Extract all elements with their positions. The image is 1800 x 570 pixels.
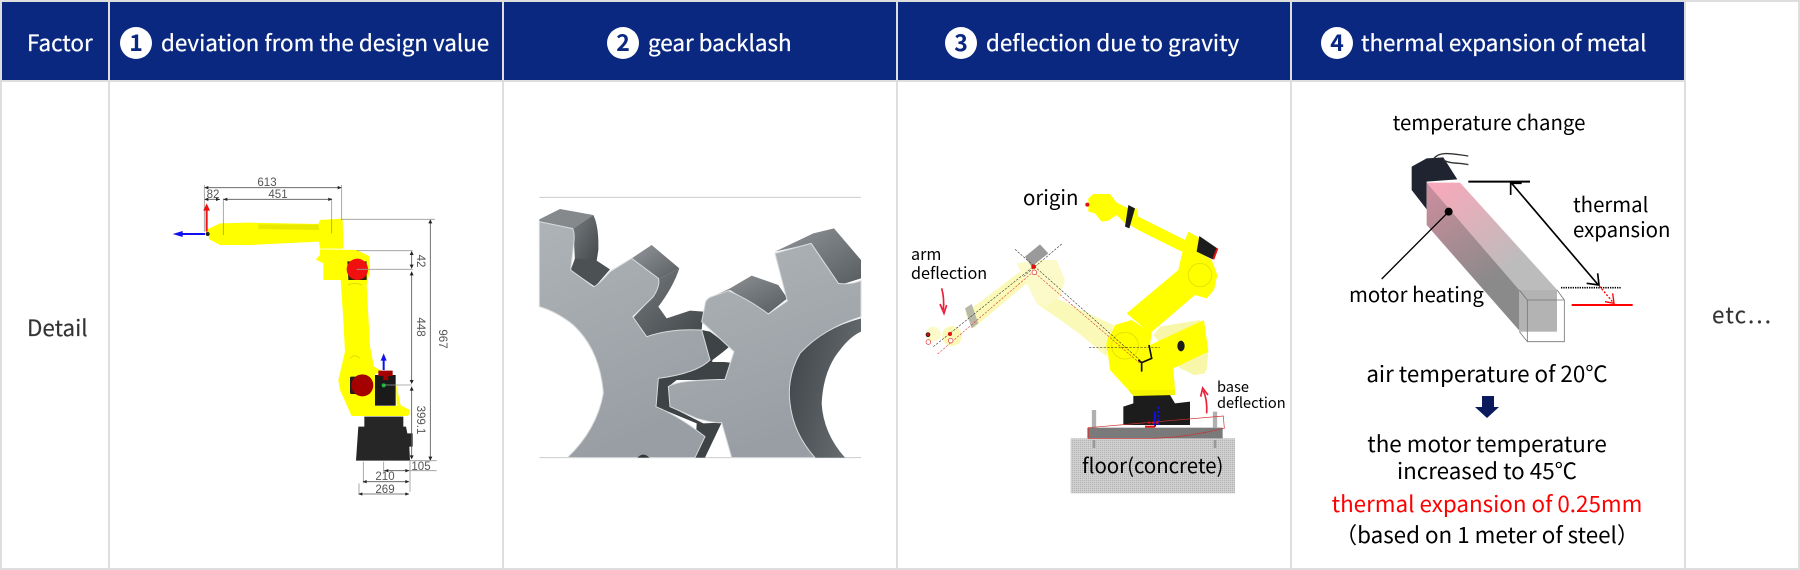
arm deflection arrow: [940, 288, 947, 313]
dimension labels: 210: [375, 471, 395, 483]
motor heating leader: [1382, 208, 1453, 279]
heading 2: 2: [616, 24, 630, 58]
robot deflection illustration: [911, 181, 1286, 493]
heading 3: 3: [954, 24, 968, 58]
text: motor temperature: increased to 45℃: [1397, 454, 1577, 486]
dimension labels: 613: [257, 177, 277, 189]
label: arm deflection: [911, 241, 987, 284]
steel bar: [1427, 183, 1564, 342]
thermal expansion diagram: [1382, 154, 1633, 342]
dimension labels: 399.1: [414, 406, 426, 434]
gears illustration: [539, 197, 861, 458]
motor: [1412, 154, 1468, 209]
label: floor: floor(concrete): [1082, 449, 1223, 479]
column 2: gear backlash: [504, 2, 896, 568]
dimension labels: 105: [411, 461, 431, 473]
heading: Factor: Factor: [27, 26, 93, 58]
left gear: [539, 209, 734, 458]
dimension labels: 42: [414, 255, 426, 267]
label: thermal expansion: thermal: [1573, 188, 1648, 218]
heading 3: deflection due to gravity: [986, 26, 1240, 58]
robot dimension drawing: [173, 177, 448, 496]
label: base deflection: [1217, 376, 1286, 413]
text: etc: etc…: [1712, 298, 1772, 330]
deflection guide lines: [926, 244, 1224, 438]
label: arm deflection: deflection: [911, 260, 987, 284]
ghost robot arm: [926, 244, 1207, 375]
robot arm body: [207, 219, 413, 461]
heading 1: deviation from the design value: [161, 26, 489, 58]
text: motor temperature: the motor temperature: [1367, 427, 1607, 459]
robot base: [1123, 395, 1190, 425]
base coordinate arrows: [1145, 407, 1158, 427]
base deflection arrow: [1201, 388, 1208, 413]
label: motor heating: motor heating: [1349, 278, 1484, 308]
heading 4: 4: [1330, 24, 1344, 58]
dimension labels: 967: [436, 329, 448, 349]
heading 2: gear backlash: [648, 26, 792, 58]
text: thermal expansion value: thermal expansion of 0.25mm: [1332, 487, 1642, 519]
label: base deflection: deflection: [1217, 392, 1286, 413]
dimension labels: 269: [375, 484, 395, 496]
icon: down arrow: [1475, 396, 1499, 418]
label: temperature change: temperature change: [1393, 106, 1585, 136]
dimension labels: 82: [207, 189, 219, 201]
label: arm deflection: arm: [911, 241, 941, 265]
column: etc: [1686, 2, 1798, 568]
label: origin: origin: [1023, 181, 1078, 211]
column: factor: [2, 2, 108, 568]
text: motor temperature: [1367, 427, 1607, 486]
expansion arrow: [1468, 182, 1633, 305]
heading 1: 1: [129, 24, 143, 58]
solid robot: [1085, 194, 1217, 396]
dimension labels: [207, 177, 448, 496]
right gear: [668, 228, 861, 458]
text: air temperature: air temperature of 20℃: [1366, 357, 1608, 389]
floor block: [1071, 410, 1235, 493]
column 3: deflection due to gravity: [898, 2, 1290, 568]
dimension labels: 448: [414, 317, 426, 337]
dimension labels: 451: [268, 189, 288, 201]
label: base deflection: base: [1217, 376, 1249, 397]
dimension lines: [204, 185, 437, 496]
label: thermal expansion: [1573, 188, 1670, 243]
heading 4: thermal expansion of metal: [1361, 26, 1647, 58]
coordinate axis arrows: [173, 203, 387, 370]
column 1: deviation from the design value: [110, 2, 502, 568]
column 4: thermal expansion of metal: [1292, 2, 1684, 568]
label: thermal expansion: expansion: [1573, 213, 1670, 243]
text: basis note: （based on 1 meter of steel）: [1335, 518, 1639, 550]
row label: Detail: Detail: [27, 311, 88, 343]
